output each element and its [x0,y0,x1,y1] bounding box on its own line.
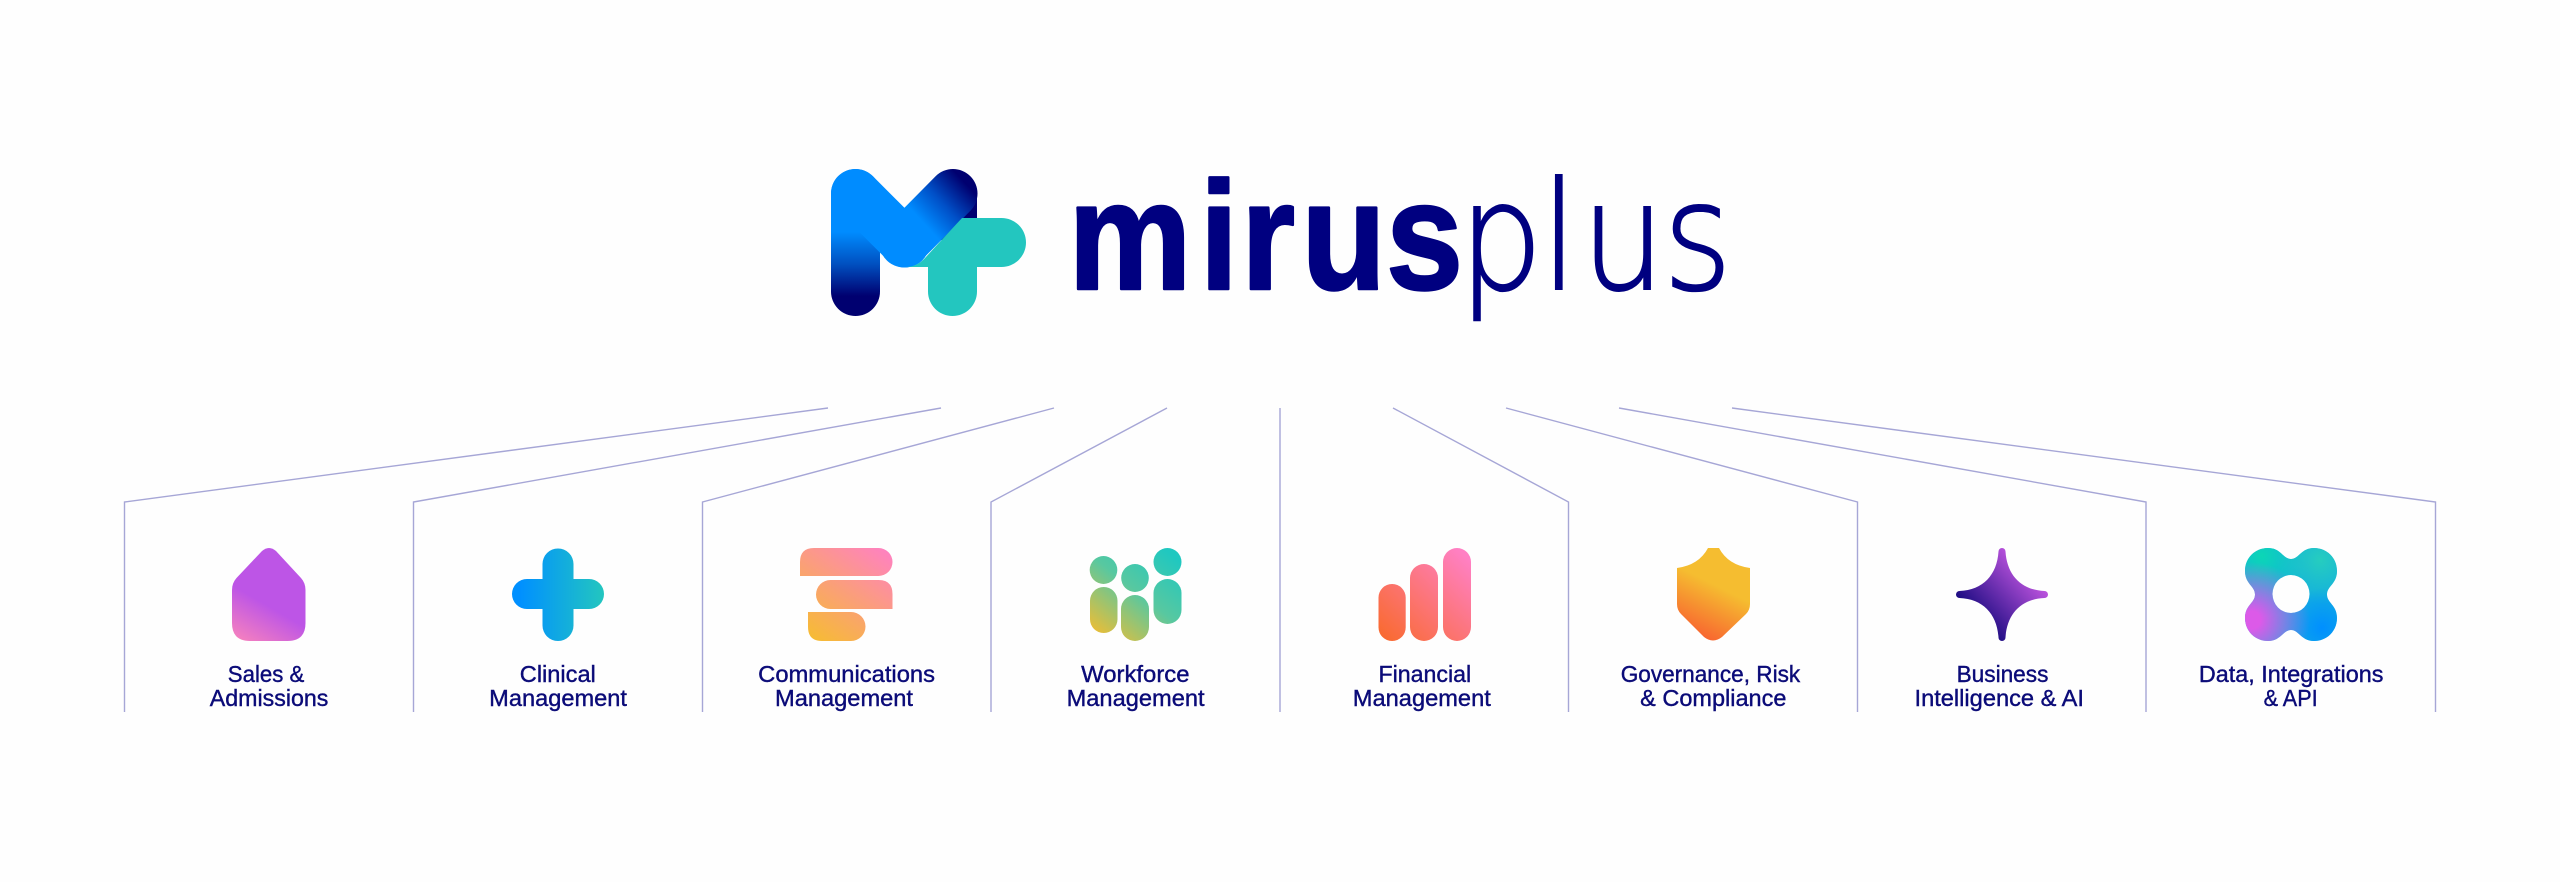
label: Communications Management: Communications [758,661,935,687]
label: Data, Integrations & API: & API [2264,685,2318,711]
label: Financial Management: Financial [1378,661,1471,687]
icon: shield [1677,548,1750,640]
label: Clinical Management [489,661,628,711]
label: Workforce Management: Management [1067,685,1205,711]
icon: data network ring [2245,548,2337,641]
icon: medical cross [512,548,604,641]
label: Communications Management: Management [775,685,914,711]
label: Sales & Admissions: Sales & [228,661,304,687]
label: Financial Management: Management [1353,685,1491,711]
label: Business Intelligence & AI: Intelligence & AI [1914,685,2084,711]
label: Workforce Management: Workforce [1081,661,1190,687]
wordmark: mirus: mirus [1068,150,1463,323]
label: Data, Integrations & API [2199,661,2383,711]
label: Clinical Management: Clinical [520,661,596,687]
logo: mirusplus [831,150,1732,325]
label: Data, Integrations & API: Data, Integrations [2199,661,2383,687]
label: Business Intelligence & AI [1914,661,2084,711]
module: Clinical Management [489,548,628,711]
icon: four-point star [1956,548,2048,641]
logo mark: M plus symbol [831,169,1026,316]
module: Sales & Admissions [210,548,328,711]
label: Sales & Admissions [210,661,328,711]
label: Clinical Management: Management [489,685,628,711]
module: Communications Management [758,548,935,711]
label: Financial Management [1353,661,1491,711]
icon: bar chart [1378,548,1471,641]
label: Governance, Risk & Compliance [1621,661,1801,711]
label: Sales & Admissions: Admissions [210,685,328,711]
icon: house [232,548,306,641]
label: Communications Management [758,661,935,711]
module: Governance, Risk & Compliance [1621,548,1801,711]
module: Financial Management [1353,548,1491,711]
module: Data, Integrations & API [2199,548,2383,711]
label: Governance, Risk & Compliance: & Compliance [1640,685,1786,711]
module: Business Intelligence & AI [1914,548,2084,711]
label: Governance, Risk & Compliance: Governance, Risk [1621,661,1801,687]
icon: stacked message bars [800,548,893,641]
module: Workforce Management [1067,548,1205,711]
label: Workforce Management [1067,661,1205,711]
label: Business Intelligence & AI: Business [1957,661,2048,687]
connector lines [124,408,2436,712]
wordmark: plus: plus [1459,151,1732,325]
icon: three people [1090,548,1182,641]
